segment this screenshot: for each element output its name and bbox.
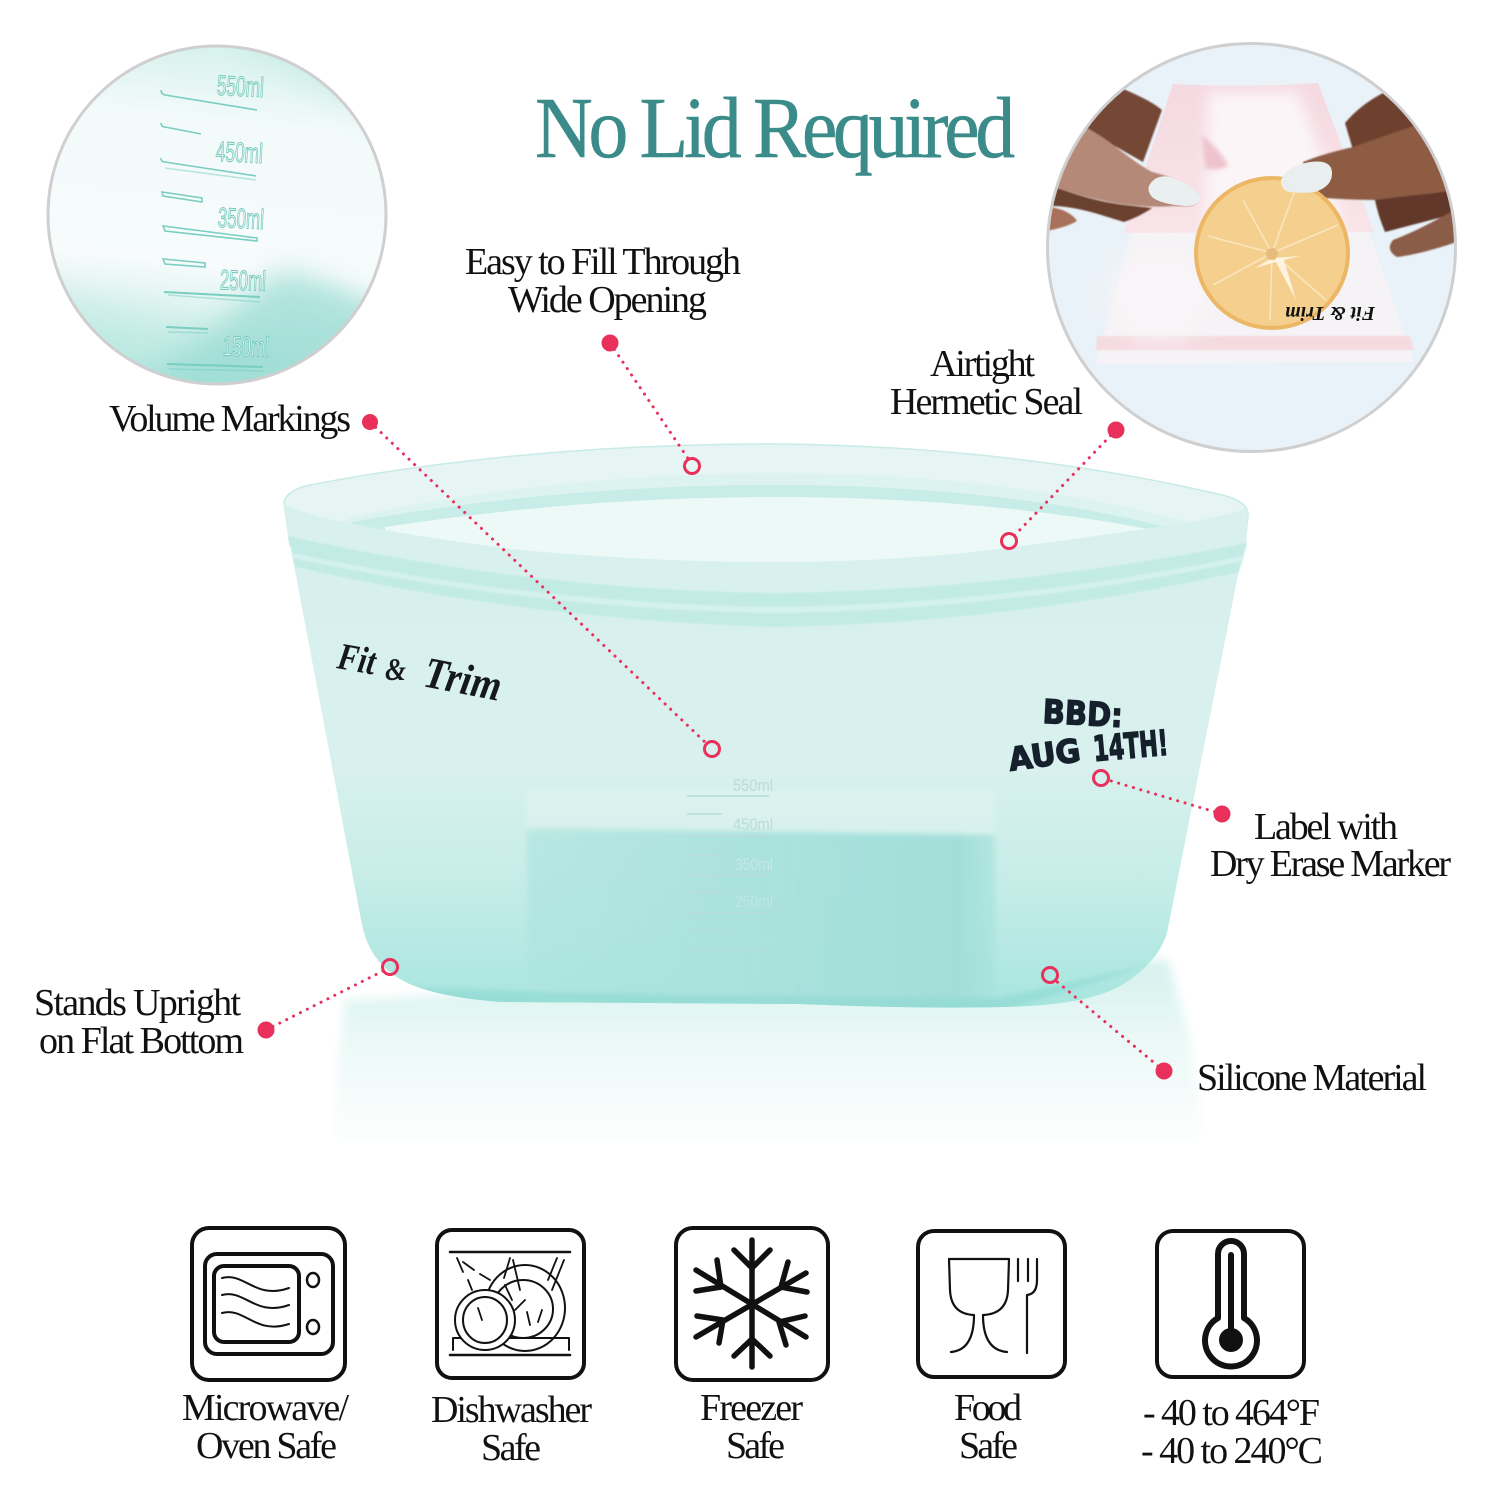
- embossed measuring scale on bag: [687, 776, 773, 950]
- volume labels: 450ml: [215, 136, 264, 169]
- icon: microwave: [192, 1228, 345, 1380]
- embossed measuring scale on bag: 550ml: [733, 776, 773, 795]
- volume scale lines: [161, 90, 263, 371]
- handwritten best-before note: AUG: [1006, 731, 1083, 779]
- embossed measuring scale on bag: 450ml: [733, 815, 773, 834]
- back rim and opening: [284, 444, 1248, 545]
- feature: temperature range: - 40 to 240°C: [1141, 1430, 1323, 1472]
- icon: snowflake: [676, 1228, 828, 1380]
- volume labels: 550ml: [216, 70, 265, 103]
- fingernails: [1148, 161, 1332, 206]
- callout: easy to fill: [465, 241, 741, 474]
- feature: microwave safe: [182, 1228, 349, 1467]
- reflection under bag: [330, 960, 1205, 1150]
- callout: silicone material: Silicone Material: [1197, 1057, 1427, 1099]
- feature: food safe: Food: [954, 1387, 1022, 1429]
- feature: dishwasher safe: Dishwasher: [431, 1389, 592, 1431]
- callout: volume markings: Volume Markings: [109, 398, 351, 440]
- callout: dry erase label: Dry Erase Marker: [1210, 843, 1451, 885]
- bag body: [293, 560, 1241, 1008]
- silicone bag product: [284, 444, 1248, 1012]
- bag photo: [1096, 83, 1414, 364]
- title: No Lid Required: [535, 81, 1015, 177]
- callout: easy to fill: Wide Opening: [508, 279, 707, 321]
- callout: airtight seal: Airtight: [930, 343, 1035, 385]
- icon: thermometer: [1157, 1231, 1304, 1377]
- feature: temperature range: - 40 to 464°F: [1143, 1392, 1320, 1434]
- panel: volume markings inset circle: [46, 44, 388, 386]
- feature: temperature range: [1141, 1231, 1323, 1472]
- callout: volume markings: [109, 398, 720, 756]
- embossed measuring scale on bag: 350ml: [735, 855, 773, 874]
- lemon slice: [1194, 176, 1350, 330]
- handwritten best-before note: [1006, 692, 1170, 779]
- callout: airtight seal: [890, 343, 1124, 548]
- callout: dry erase label: Label with: [1254, 806, 1398, 848]
- feature: microwave safe: Oven Safe: [196, 1425, 337, 1467]
- feature: freezer safe: Safe: [726, 1425, 785, 1467]
- callout: stands upright: Stands Upright: [34, 982, 241, 1024]
- panel: lemon bag inset circle: [1045, 44, 1462, 452]
- callout: easy to fill: Easy to Fill Through: [465, 241, 741, 283]
- handwritten best-before note: BBD:: [1042, 692, 1124, 735]
- icon: glass and fork: [918, 1231, 1065, 1377]
- brand name on bag: &: [385, 651, 406, 687]
- volume labels: 350ml: [217, 202, 265, 235]
- front seal band: [284, 504, 1248, 600]
- callout: airtight seal: Hermetic Seal: [890, 381, 1083, 423]
- brand name on bag: Trim: [420, 648, 506, 711]
- bag brand mark: Fit & Trim: [1285, 302, 1376, 324]
- feature: dishwasher safe: Safe: [481, 1427, 541, 1469]
- callout: dry erase label: [1094, 770, 1451, 885]
- volume labels: 150ml: [222, 330, 269, 363]
- feature: food safe: Safe: [959, 1425, 1018, 1467]
- feature: food safe: [918, 1231, 1065, 1467]
- brand name on bag: [334, 635, 506, 711]
- callout: stands upright: on Flat Bottom: [39, 1020, 244, 1062]
- handwritten best-before note: 14TH!: [1092, 724, 1170, 770]
- callout: silicone material: [1042, 968, 1427, 1099]
- embossed measuring scale on bag: 150ml: [735, 929, 773, 948]
- brand name on bag: Fit: [334, 635, 380, 684]
- volume labels: 250ml: [219, 264, 267, 297]
- embossed measuring scale on bag: 250ml: [735, 892, 773, 911]
- volume labels: [215, 70, 269, 363]
- feature: freezer safe: Freezer: [700, 1387, 803, 1429]
- icon: dishwasher: [437, 1230, 584, 1378]
- feature: freezer safe: [676, 1228, 828, 1467]
- hands: [1045, 88, 1462, 257]
- feature: microwave safe: Microwave/: [182, 1387, 349, 1429]
- callout: stands upright: [34, 960, 398, 1062]
- feature: dishwasher safe: [431, 1230, 592, 1469]
